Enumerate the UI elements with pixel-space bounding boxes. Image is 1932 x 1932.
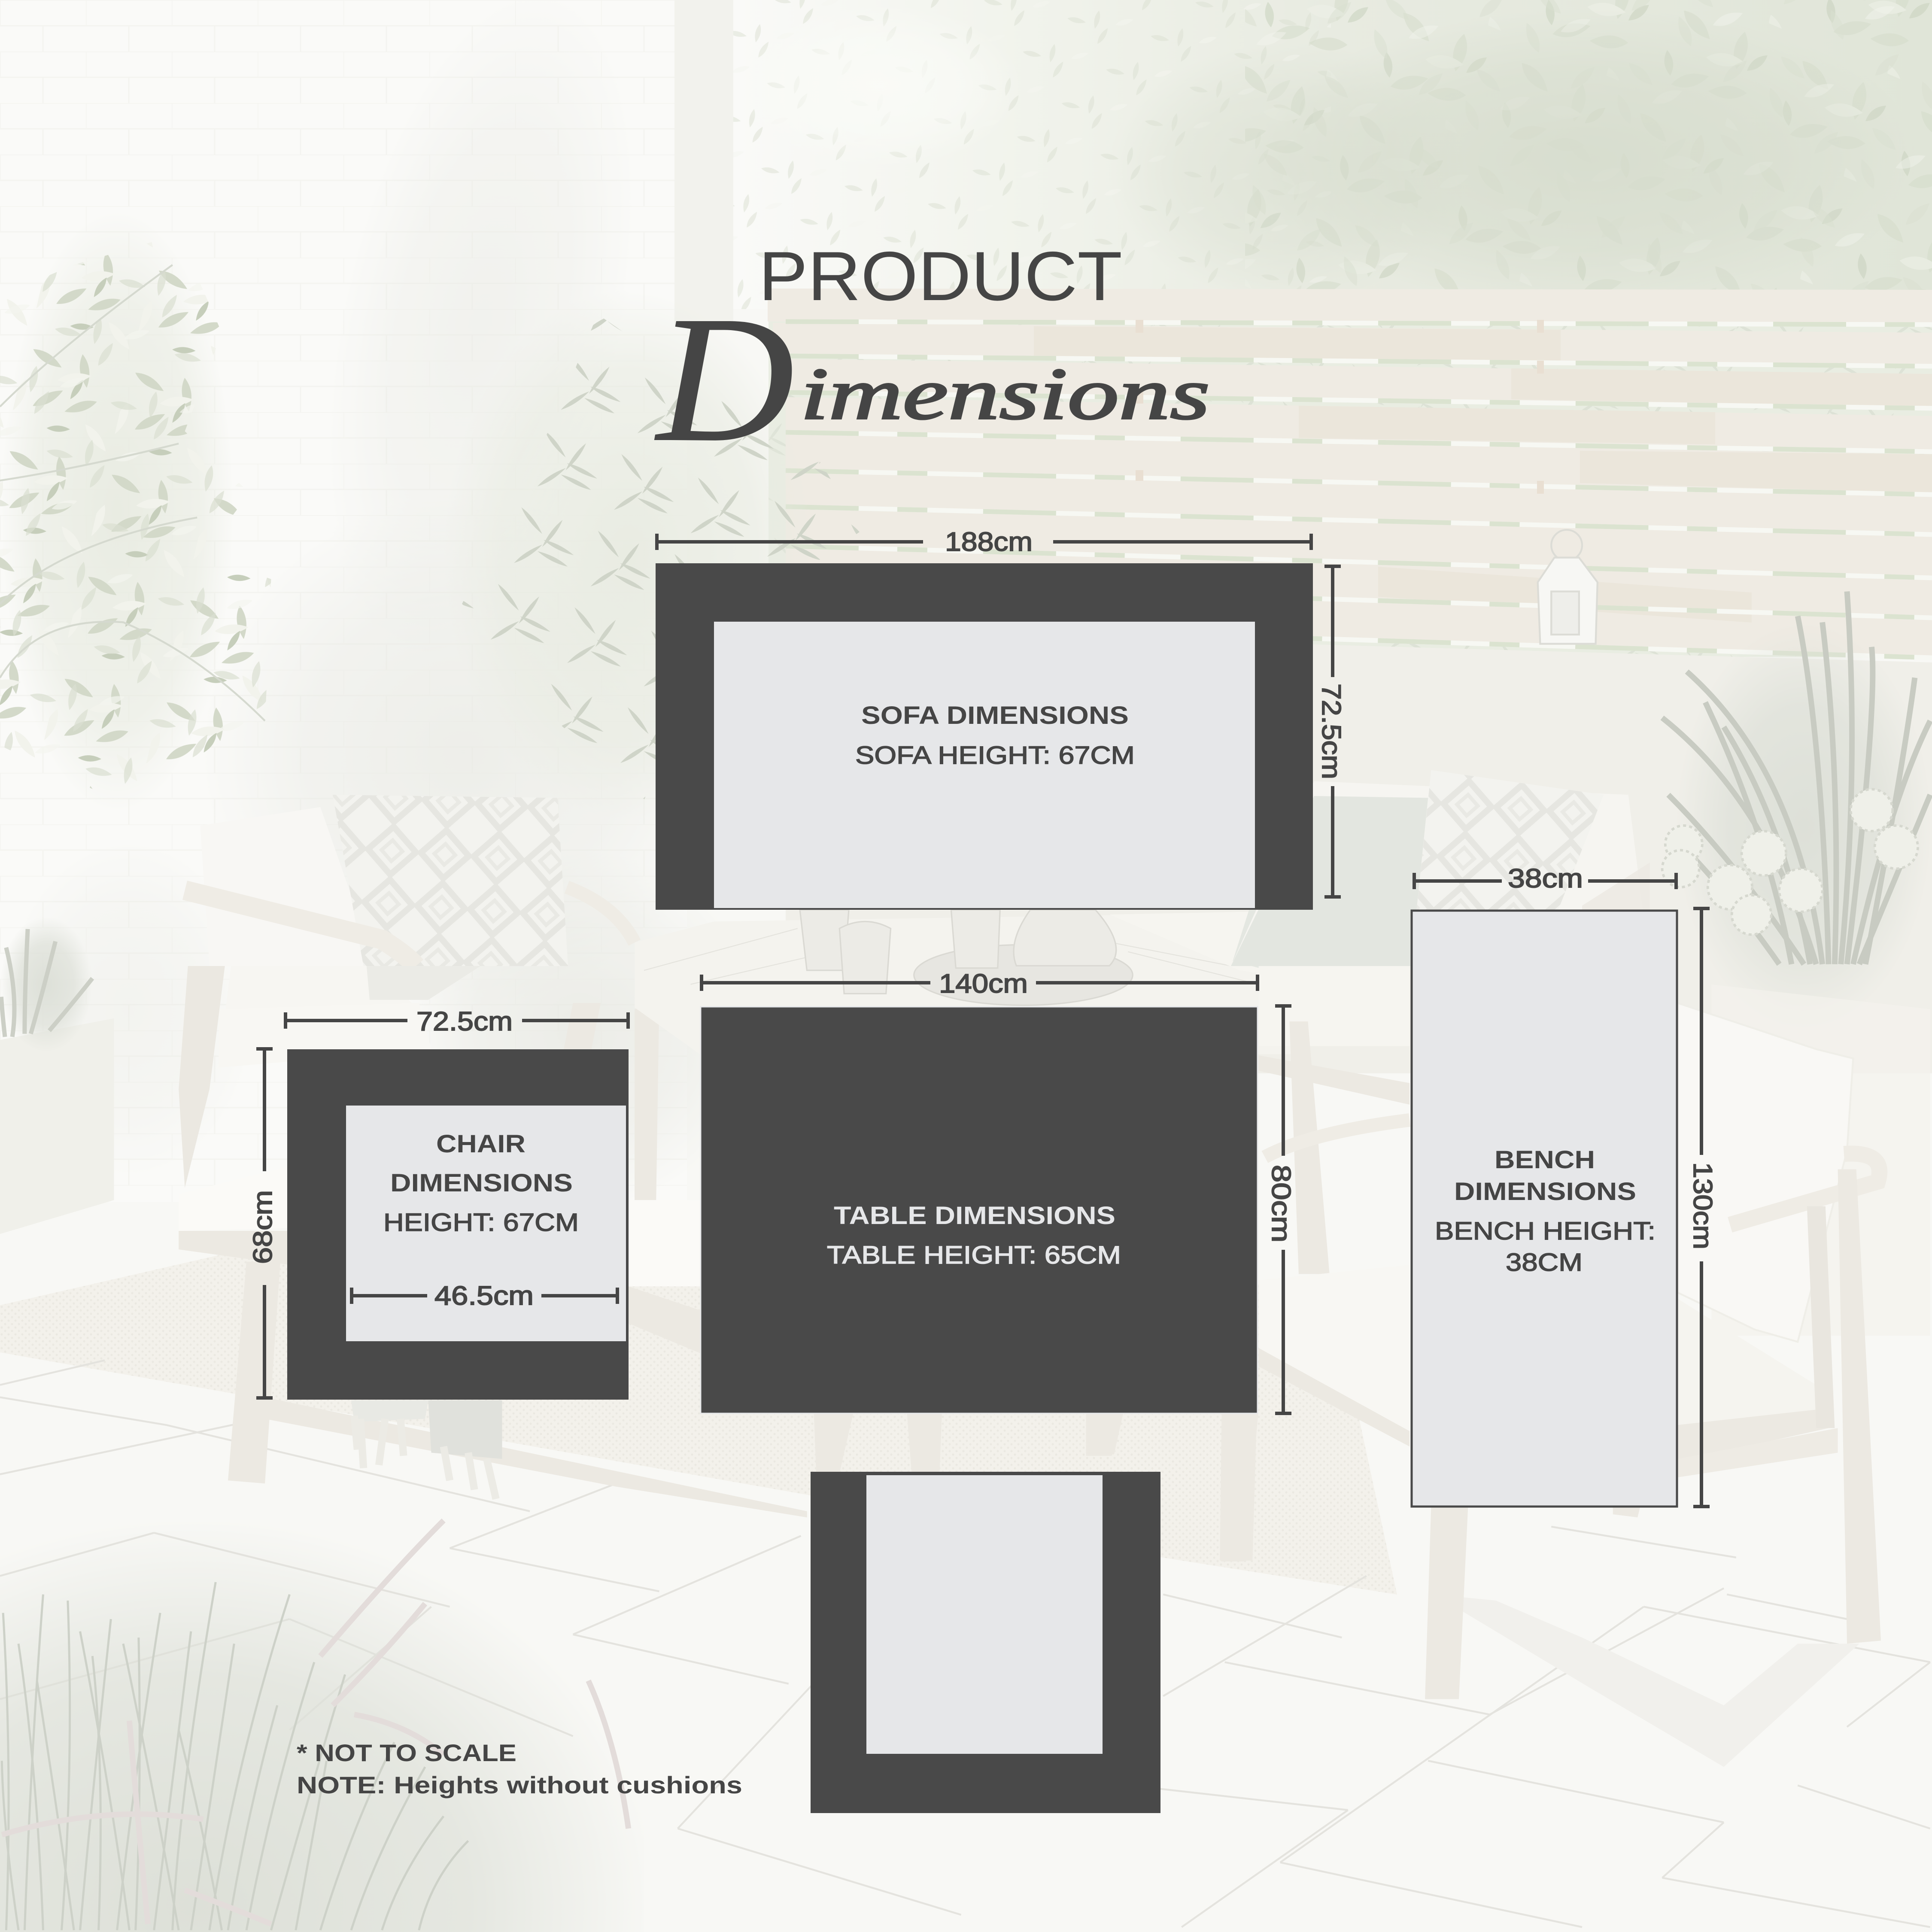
dimension: table width 140cm: 140cm [939,969,1028,999]
lower terrace wall [786,629,1932,1073]
bench heading: BENCH [1495,1146,1595,1174]
title: Dimensions script: D [654,279,794,479]
panel: bench [1412,911,1677,1507]
dimension: table depth 80cm: 80cm [1266,1165,1296,1242]
wall shadows [0,0,760,1211]
fence posts [1136,320,1544,494]
bench heading: DIMENSIONS [1454,1178,1636,1206]
brick wall [0,0,687,1202]
sofa heading: SOFA DIMENSIONS [861,702,1129,729]
chair shadow on floor [1434,1595,1859,1767]
right chair and sofa [1086,942,1930,1699]
window and distant foliage [730,0,1932,309]
dimension: sofa width 188cm: 188cm [945,527,1033,557]
dimension: chair seat 46.5cm: 46.5cm [434,1281,534,1311]
chair height: HEIGHT: 67CM [383,1209,579,1236]
dimension: chair width 72.5cm: 72.5cm [416,1007,513,1036]
panel: sofa [656,563,1313,910]
pillar [674,0,733,326]
bench height: 38CM [1506,1249,1583,1276]
dimension: sofa depth 72.5cm: 72.5cm [1316,683,1346,779]
dimension: sofa width 188cm [657,527,1311,557]
chair heading: CHAIR [436,1130,526,1158]
dimension: table depth 80cm [1266,1006,1296,1413]
title: PRODUCT: PRODUCT [759,237,1122,315]
foreground grasses [0,1395,644,1932]
throw blanket [351,1400,502,1499]
note: scale disclaimer: * NOT TO SCALE [297,1739,516,1766]
chair heading: DIMENSIONS [390,1169,573,1197]
panel: table [701,1007,1258,1413]
dimension: bench length 130cm: 130cm [1688,1162,1717,1249]
right planter grasses and flowers [1662,592,1932,1029]
dimension: bench width 38cm [1414,864,1676,893]
table height: TABLE HEIGHT: 65CM [827,1241,1121,1269]
right sofa pillows [1231,770,1650,966]
bench heading [1454,1146,1636,1206]
panel: chair [287,1049,629,1400]
dimension: sofa depth 72.5cm [1316,566,1346,897]
floor, rug and tile joints [0,1224,1932,1932]
gaps between fence boards [786,322,1932,658]
dimension: chair seat 46.5cm [352,1281,617,1311]
dimension: bench length 130cm [1688,908,1717,1507]
chair heading [390,1130,573,1197]
table heading: TABLE DIMENSIONS [834,1202,1115,1230]
note: scale disclaimer [297,1739,742,1798]
bench height: BENCH HEIGHT: [1435,1217,1656,1245]
table with glassware [635,910,1388,1054]
panel: bottom seat [811,1472,1160,1813]
note: scale disclaimer: NOTE: Heights without cushions [297,1771,742,1798]
dimension: chair depth 68cm: 68cm [248,1190,278,1264]
dimension: chair depth 68cm [248,1049,278,1398]
sofa height: SOFA HEIGHT: 67CM [855,741,1135,769]
title: Dimensions script: imensions [800,353,1210,435]
bench height [1435,1217,1656,1276]
left chair [185,795,635,966]
olive plant [444,289,863,820]
slatted fence [768,289,1932,658]
lantern [1538,530,1598,644]
dimension: bench width 38cm: 38cm [1508,864,1583,893]
planter left [0,917,114,1234]
dimension: table width 140cm [702,969,1258,999]
left tree [0,210,271,813]
darker fence boards [1034,326,1932,623]
dimension: chair width 72.5cm [286,1007,628,1036]
